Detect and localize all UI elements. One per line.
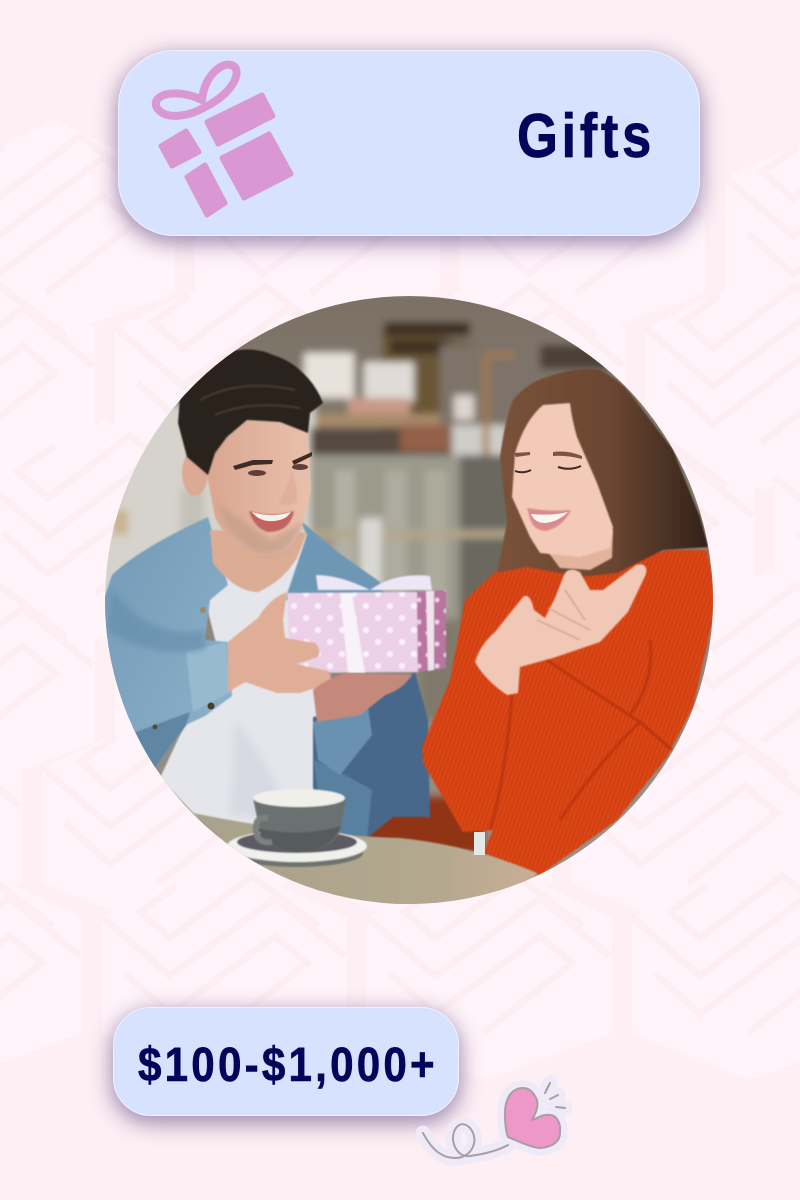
- panel: gifts header: [118, 50, 700, 236]
- sticker halo: [423, 1083, 565, 1158]
- text: price range: $100-$1,000+: [138, 1037, 438, 1092]
- man: hands holding gift: [228, 592, 412, 722]
- woman: hair: [497, 369, 708, 577]
- man: face and ear: [182, 420, 312, 556]
- gift box with polka dots: [287, 575, 446, 673]
- curly string: [423, 1124, 508, 1158]
- icon: gift box with bow: [161, 95, 291, 215]
- title: Gifts: Gifts: [517, 102, 655, 171]
- icon: gift ribbon loops: [156, 65, 237, 116]
- woman: red ribbed sweater: [422, 550, 716, 875]
- spark lines: [545, 1083, 565, 1108]
- panel: price range: [113, 1007, 459, 1116]
- coffee cup and saucer: [227, 789, 367, 867]
- photo: couple exchanging a gift in a circular crop: [105, 296, 713, 904]
- woman: neck: [545, 530, 613, 570]
- man: sleeve cuff and folds: [108, 590, 231, 775]
- chair leg: [474, 832, 485, 855]
- decoration: heart with curly string: [423, 1083, 565, 1158]
- table top: [194, 812, 538, 904]
- man: dark hair: [178, 350, 323, 475]
- woman: sleeve fold shadows: [490, 630, 672, 830]
- man: denim jacket, left side: [100, 517, 232, 775]
- woman: hands on chest: [475, 564, 646, 695]
- photo background: café wall and shelves: [100, 290, 720, 910]
- man: hair highlights: [200, 386, 300, 415]
- woman: face: [512, 403, 613, 557]
- man: shirt fold shading: [232, 729, 276, 816]
- man: denim jacket, right side: [285, 520, 430, 838]
- man: neck: [210, 530, 307, 592]
- man: white t-shirt: [160, 533, 320, 832]
- heart: [505, 1088, 560, 1148]
